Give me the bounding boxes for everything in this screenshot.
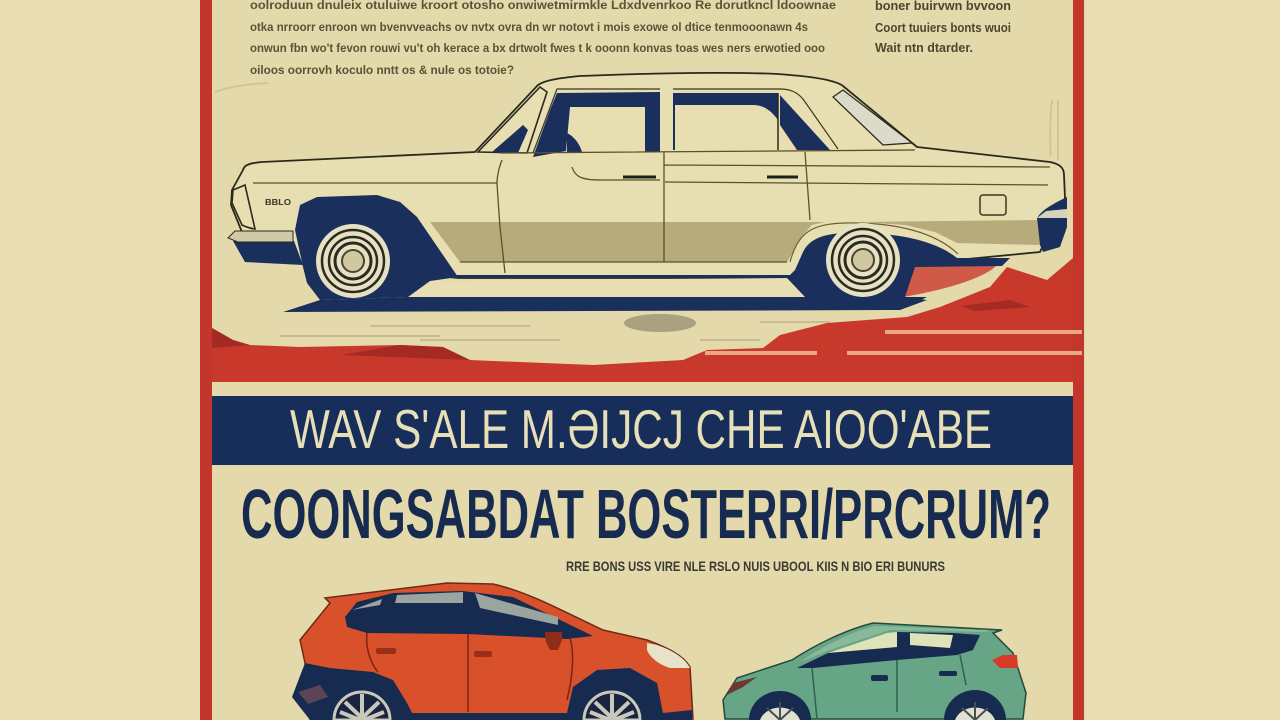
poster paper panel	[200, 0, 1085, 720]
red border left	[200, 0, 212, 720]
door handles and mirror	[376, 648, 396, 654]
windows	[797, 632, 980, 668]
door seams	[812, 655, 966, 719]
illustration: green hatchback	[723, 623, 1026, 720]
headlight	[727, 677, 757, 695]
banner	[212, 396, 1073, 465]
red wash behind rear	[903, 265, 997, 297]
taillight	[298, 685, 328, 704]
front wheel	[316, 224, 390, 298]
intro text block: otka nrroorr enroon wn bvenvveachs ov nvtx ovra dn wr notovt i mois exowe ol dtice tenmooonawn 4s	[250, 20, 808, 34]
rear quarter glass	[833, 90, 912, 145]
side note text: Wait ntn dtarder.	[875, 40, 973, 55]
illustration: vintage sedan	[228, 73, 1067, 312]
front door window	[533, 92, 660, 157]
body shell	[231, 73, 1065, 278]
wheel arches	[749, 691, 811, 720]
rear wheel	[826, 223, 900, 297]
rear wheel arch	[787, 233, 1010, 310]
intro text block: onwun fbn wo't fevon rouwi vu't oh kerace a bx drtwolt fwes t k ooonn konvas toas wes ners erwotied ooo	[250, 41, 825, 55]
badge: BBLO	[265, 198, 291, 207]
door handles	[871, 675, 888, 681]
headlight	[647, 643, 690, 668]
fuel door	[980, 195, 1006, 215]
taillight	[992, 655, 1018, 668]
windows	[345, 591, 593, 639]
paper scratches	[215, 83, 1058, 160]
rear door window	[673, 93, 778, 150]
wheels	[334, 692, 390, 720]
rear bumper	[1037, 197, 1067, 252]
torn red paper edge	[212, 258, 1082, 382]
wheels	[760, 702, 800, 720]
subheading: RRE BONS USS VIRE NLE RSLO NUIS UBOOL KIIS N BIO ERI BUNURS	[566, 558, 945, 574]
side note text	[875, 0, 1011, 55]
side note text: Coort tuuiers bonts wuoi	[875, 20, 1011, 35]
red border right	[1073, 0, 1084, 720]
front fender and wheel arch	[295, 195, 458, 300]
intro text block: oiloos oorrovh koculo nntt os & nule os totoie?	[250, 63, 514, 77]
front bumper	[233, 241, 303, 265]
salmon speed lines	[885, 330, 1082, 334]
lower dark trim	[292, 663, 692, 720]
door seams	[367, 633, 573, 712]
banner headline: WAV S'ALE M.ƏIJCJ CHE AIOO'ABE	[290, 398, 992, 460]
tan stripe	[430, 222, 825, 262]
door seams and trim	[253, 150, 1050, 273]
lower cream strip	[408, 278, 805, 297]
windshield	[478, 87, 547, 153]
intro text block	[250, 0, 836, 77]
door handles	[623, 176, 656, 178]
road smudge	[624, 314, 696, 332]
illustration: red hatchback	[292, 583, 693, 720]
ground shadow band	[283, 297, 927, 312]
headlight	[232, 185, 255, 229]
